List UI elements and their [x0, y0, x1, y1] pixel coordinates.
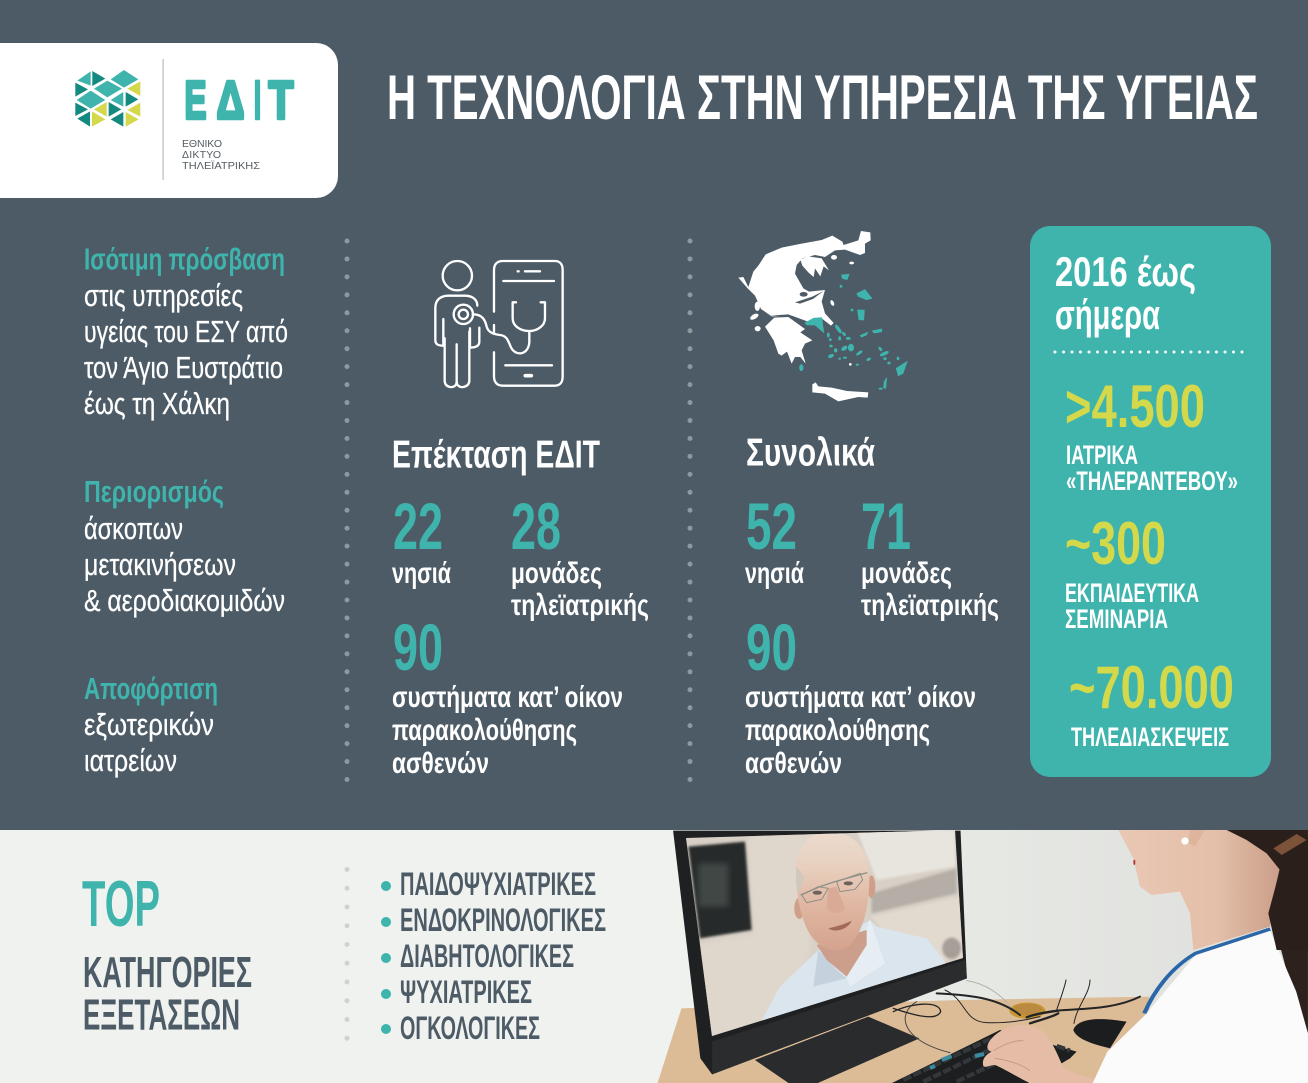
logo wordmark: Δ: [216, 70, 244, 130]
keyboard, hand and mouse: [890, 1019, 1127, 1083]
stat: seminars: ΕΚΠΑΙΔΕΥΤΙΚΑ: [1065, 578, 1199, 608]
heading: top exam categories: [82, 867, 252, 1040]
panel heading: [1055, 248, 1196, 338]
panel: totals column: [745, 432, 999, 780]
logo wordmark: Ε: [184, 70, 206, 130]
stat: 28 units: μονάδες: [511, 557, 602, 590]
stat: 52 islands: [745, 489, 804, 590]
logo subtitle: ΔΙΚΤΥΟ: [182, 149, 221, 161]
map of Greece: [738, 231, 907, 401]
heading: Επέκταση ΕΔΙΤ: [392, 434, 600, 476]
icon: hexagon triangle logo mark: [75, 70, 140, 127]
stat: 71 units: [861, 489, 999, 622]
list: categories: ΨΥΧΙΑΤΡΙΚΕΣ: [400, 974, 532, 1010]
benefit: outpatient relief: ιατρείων: [84, 743, 177, 778]
benefit: equal access: Ισότιμη πρόσβαση: [84, 242, 285, 276]
stat: seminars: ΣΕΜΙΝΑΡΙΑ: [1065, 604, 1168, 634]
logo panel: [0, 43, 338, 198]
logo wordmark: Τ: [268, 70, 294, 130]
panel: benefits text column: [84, 242, 288, 778]
heading: top exam categories: TOP: [82, 867, 160, 940]
icon: patient with stethoscope and smartphone: [435, 261, 563, 387]
heading: top exam categories: ΕΞΕΤΑΣΕΩΝ: [83, 990, 240, 1040]
logo wordmark: Ι: [254, 70, 261, 130]
stat: 90 home systems: ασθενών: [392, 747, 489, 780]
stat: 90 home systems: 90: [746, 610, 797, 684]
benefit: equal access: έως τη Χάλκη: [84, 386, 230, 421]
stat: appointments: ΙΑΤΡΙΚΑ: [1066, 440, 1138, 470]
benefit: fewer transfers: άσκοπων: [84, 511, 183, 546]
stat: appointments: >4.500: [1065, 373, 1205, 440]
stat: appointments: [1065, 373, 1238, 496]
benefit: equal access: υγείας του ΕΣΥ από: [84, 314, 288, 349]
stat: 90 home systems: [745, 610, 976, 780]
stat: teleconferences: ~70.000: [1069, 654, 1234, 721]
logo subtitle: ΤΗΛΕΪΑΤΡΙΚΗΣ: [182, 160, 261, 172]
stat: 52 islands: νησιά: [745, 557, 804, 590]
benefit: outpatient relief: Αποφόρτιση: [84, 671, 218, 706]
stat: seminars: [1065, 510, 1199, 634]
stat: 22 islands: [392, 489, 451, 590]
stat: seminars: ~300: [1065, 510, 1166, 577]
list: categories: ΕΝΔΟΚΡΙΝΟΛΟΓΙΚΕΣ: [400, 902, 606, 938]
benefit: outpatient relief: εξωτερικών: [84, 707, 214, 742]
benefit: equal access: στις υπηρεσίες: [84, 278, 243, 313]
stat: teleconferences: [1069, 654, 1234, 752]
benefit: outpatient relief: [84, 671, 218, 778]
benefit: fewer transfers: & αεροδιακομιδών: [84, 583, 285, 618]
stat: 22 islands: νησιά: [392, 557, 451, 590]
patient on screen: [680, 830, 973, 1043]
stat: teleconferences: ΤΗΛΕΔΙΑΣΚΕΨΕΙΣ: [1071, 722, 1229, 752]
heading: top exam categories: ΚΑΤΗΓΟΡΙΕΣ: [83, 948, 252, 997]
benefit: equal access: τον Άγιο Ευστράτιο: [84, 350, 283, 385]
list: categories: [381, 866, 606, 1046]
logo subtitle: ΕΘΝΙΚΟ: [182, 138, 222, 150]
stat: 90 home systems: 90: [393, 610, 443, 684]
stat: 71 units: τηλεϊατρικής: [861, 589, 999, 622]
panel: since 2016 statistics: [1030, 226, 1271, 777]
stat: 90 home systems: συστήματα κατ’ οίκον: [745, 681, 976, 714]
stat: 90 home systems: [392, 610, 623, 780]
stat: 71 units: 71: [861, 489, 911, 563]
stat: 90 home systems: ασθενών: [745, 747, 842, 780]
photo: doctor in video call with patient: [658, 830, 1308, 1083]
panel heading: σήμερα: [1055, 291, 1160, 338]
benefit: fewer transfers: Περιορισμός: [84, 474, 224, 509]
benefit: fewer transfers: μετακινήσεων: [84, 547, 236, 582]
panel: expansion column: [392, 434, 649, 780]
list: categories: ΠΑΙΔΟΨΥΧΙΑΤΡΙΚΕΣ: [400, 866, 596, 902]
list: categories: ΟΓΚΟΛΟΓΙΚΕΣ: [400, 1010, 540, 1046]
heading: Συνολικά: [746, 432, 875, 474]
stat: 90 home systems: συστήματα κατ’ οίκον: [392, 681, 623, 714]
logo wordmark: [184, 70, 294, 130]
stat: 90 home systems: παρακολούθησης: [745, 714, 930, 747]
benefit: equal access: [84, 242, 288, 421]
doctor: [1093, 830, 1308, 1083]
stat: 28 units: [511, 489, 649, 622]
list: categories: ΔΙΑΒΗΤΟΛΟΓΙΚΕΣ: [400, 938, 574, 974]
stat: appointments: «ΤΗΛΕΡΑΝΤΕΒΟΥ»: [1066, 466, 1238, 496]
stat: 71 units: μονάδες: [861, 557, 952, 590]
panel heading: 2016 έως: [1055, 248, 1196, 295]
logo subtitle: [182, 138, 261, 172]
stat: 28 units: τηλεϊατρικής: [511, 589, 649, 622]
benefit: fewer transfers: [84, 474, 285, 618]
stat: 28 units: 28: [511, 489, 561, 563]
stat: 52 islands: 52: [746, 489, 797, 563]
stat: 90 home systems: παρακολούθησης: [392, 714, 577, 747]
stat: 22 islands: 22: [393, 489, 443, 563]
panel: bottom band: [0, 830, 1308, 1083]
